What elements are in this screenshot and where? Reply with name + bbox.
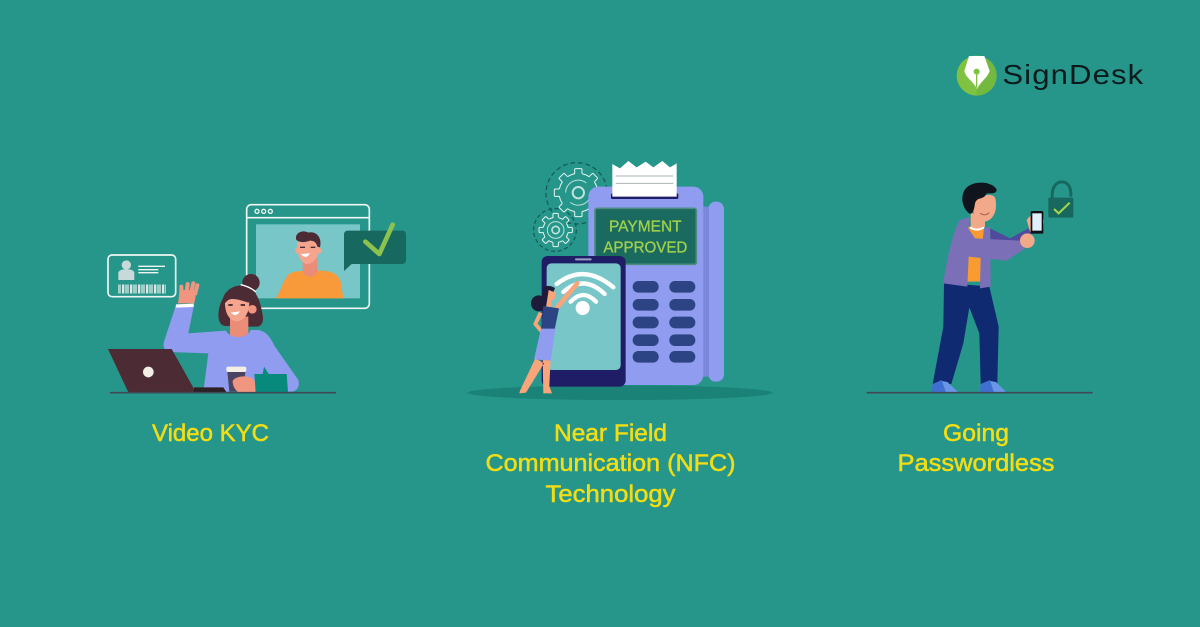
logo: SignDesk [957,56,1144,96]
caption: NFC [486,420,736,508]
ground shadow [467,385,773,400]
illustration: man with phone [867,182,1093,393]
logo wordmark: SignDesk [1002,59,1144,90]
speech bubble with check [344,225,406,271]
caption: NFC: Near Field [554,420,667,447]
terminal back [708,202,724,382]
illustration: video KYC [108,205,406,393]
ground line [867,390,1093,395]
panel: Going Passwordless [867,182,1093,477]
icon: pen nib [957,56,997,96]
panel: NFC [467,161,773,508]
caption: NFC: Technology [546,481,676,508]
terminal body [588,187,703,385]
terminal screen: APPROVED [603,240,687,257]
icon: wifi [557,274,613,315]
video call window [247,205,369,308]
caption: Video KYC: Video KYC [152,420,269,447]
illustration: payment terminal [467,161,773,400]
man on video call [276,231,343,298]
laptop [108,349,227,392]
receipt [611,161,678,199]
caption: NFC: Communication (NFC) [486,450,736,477]
keypad [633,281,695,363]
woman pointing [519,283,577,393]
smartphone [542,256,626,387]
smartphone [1031,211,1043,234]
woman waving [164,274,299,392]
caption: Going Passwordless: Passwordless [898,450,1054,477]
caption: Going Passwordless [898,420,1054,477]
caption: Going Passwordless: Going [943,420,1009,447]
ID card [108,255,176,297]
terminal screen [595,208,696,264]
coffee cup [226,367,256,392]
padlock [1048,182,1073,218]
panel: Video KYC [108,205,406,447]
terminal screen: PAYMENT [609,219,682,236]
gears [534,163,607,251]
man [931,183,1044,393]
ground line [110,390,336,395]
